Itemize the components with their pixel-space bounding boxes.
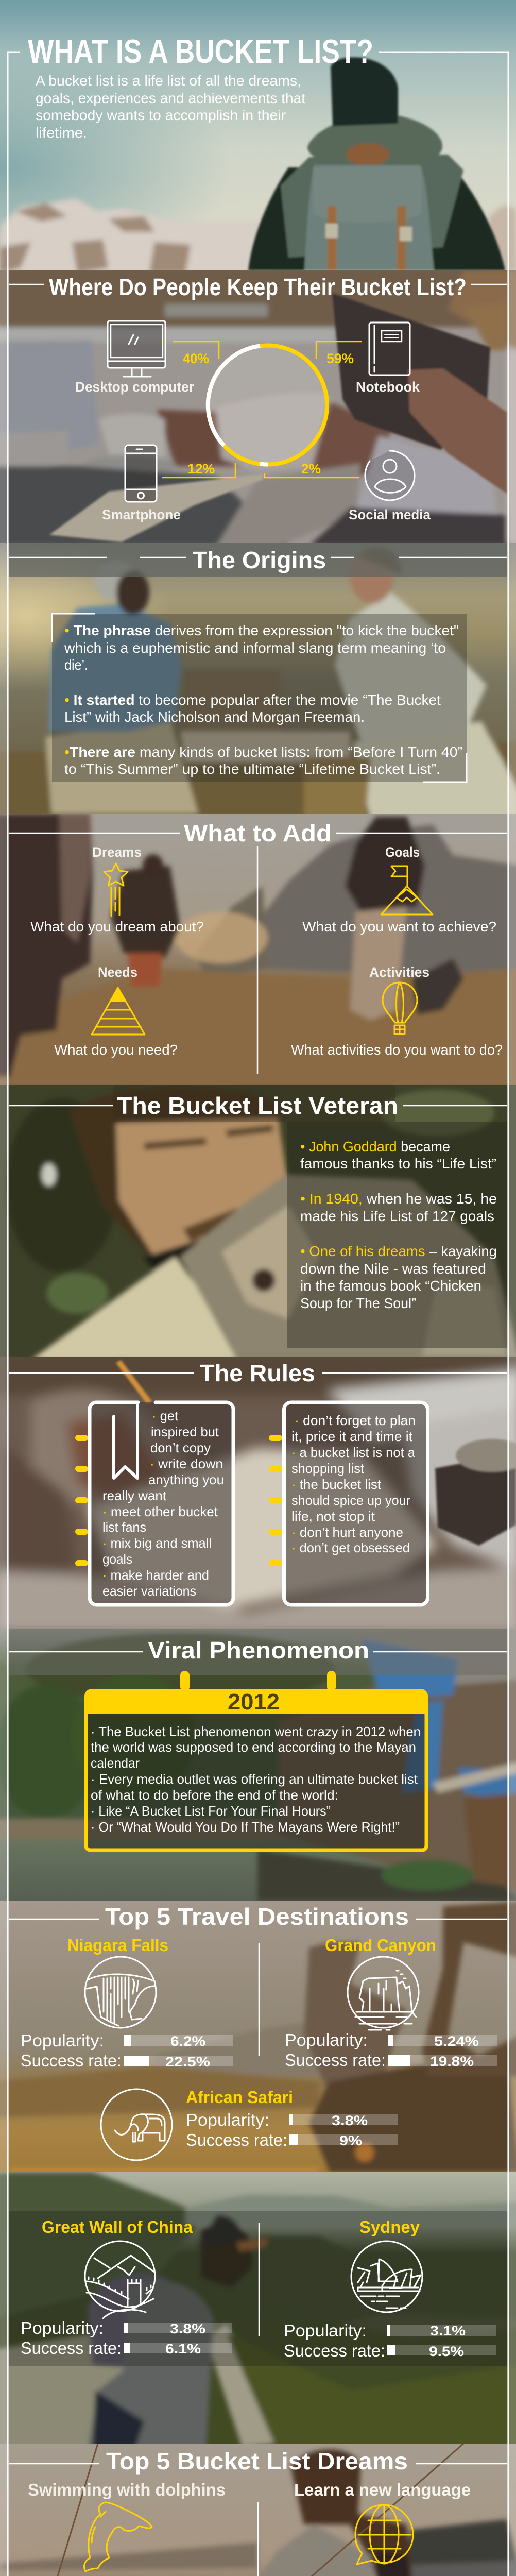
block: goals: Goals: [385, 844, 420, 860]
heading: The Bucket List Veteran: [117, 1092, 398, 1119]
panel: top 5 bucket list dreams: [0, 2444, 516, 2576]
photo: riverside shanty houses: [0, 1628, 516, 1901]
panel: great wall and sydney: [0, 2172, 516, 2452]
text: rules list two: · don’t get obsessed: [291, 1540, 410, 1555]
calendar panel 2012: [84, 1671, 428, 1850]
text panel: origins facts: •There are many kinds of bucket lists: from “Before I Turn 40”: [64, 744, 462, 760]
panel: where do people keep their bucket list: [0, 265, 516, 546]
heading: The Origins: [193, 547, 326, 573]
intro text: somebody wants to accomplish in their: [36, 107, 286, 123]
icon: desktop computer with 40% callout: 40%: [183, 351, 209, 366]
icon: dolphin: [84, 2502, 152, 2571]
icon: globe speech bubble: [355, 2505, 413, 2564]
text: rules list one: goals: [102, 1551, 132, 1567]
icon: desktop computer with 40% callout: [75, 321, 219, 395]
binding tabs: [269, 1435, 282, 1566]
panel: what to add: [0, 814, 516, 1087]
text: john goddard facts: • John Goddard became: [300, 1139, 450, 1155]
heading: The Rules: [200, 1360, 315, 1386]
stats: [186, 2110, 398, 2149]
text: rules list two: it, price it and time it: [291, 1429, 413, 1444]
panel: hero, what is a bucket list: [0, 0, 516, 278]
icon: great wall: [85, 2241, 155, 2318]
stats: 6.2%: [170, 2033, 205, 2049]
text: rules list one: · mix big and small: [102, 1535, 212, 1551]
stats: Success rate:: [21, 2051, 122, 2070]
icon: social media with 2% callout: [265, 451, 431, 522]
photo: man hugging a tiger cub: [0, 1085, 516, 1360]
block: activities: Activities: [369, 964, 429, 980]
block: dreams: [30, 844, 204, 935]
icon: opera house: [351, 2241, 422, 2312]
stats: Popularity:: [21, 2031, 104, 2050]
card: swimming with dolphins: [21, 2480, 233, 2576]
intro text: A bucket list is a life list of all the dreams,: [36, 73, 301, 89]
header band: [9, 1629, 507, 1675]
icon: notebook with 59% callout: [316, 323, 420, 395]
block: goals: What do you want to achieve?: [302, 919, 496, 935]
text panel: origins facts: which is a euphemistic and informal slang term meaning ‘to: [64, 640, 446, 656]
card: niagara falls: [21, 1936, 233, 2070]
hero photo: traveller and snowy mountains: [0, 0, 516, 278]
icon: shooting star: [104, 863, 128, 916]
stats: 6.1%: [165, 2341, 201, 2357]
text: viral facts: · Like “A Bucket List For Your Final Hours”: [91, 1803, 331, 1819]
text panel: origins facts: • The phrase derives from the expression "to kick the bucket": [64, 622, 459, 638]
text: rules list one: inspired but: [151, 1424, 219, 1439]
text: john goddard facts: famous thanks to his “Life List”: [300, 1156, 496, 1172]
photo: couple on a sailing boat: [0, 2444, 516, 2576]
stats: Popularity:: [21, 2318, 104, 2337]
block: activities: What activities do you want to do?: [291, 1042, 503, 1058]
stats: Success rate:: [285, 2050, 386, 2070]
text: rules list one: really want: [102, 1488, 167, 1503]
heading: Top 5 Travel Destinations: [105, 1903, 409, 1930]
heading: What to Add: [184, 820, 332, 846]
card: rules left with bookmark: [75, 1402, 233, 1605]
stats: Success rate:: [21, 2338, 122, 2358]
photo: hikers in a meadow: [0, 814, 516, 1087]
block: dreams: Dreams: [92, 844, 142, 860]
photo: man on a jeep at a savanna: [0, 1901, 516, 2172]
text: viral facts: · The Bucket List phenomenon went crazy in 2012 when: [91, 1724, 421, 1739]
stats: 3.8%: [332, 2113, 368, 2128]
text: viral facts: calendar: [91, 1755, 140, 1771]
text: john goddard facts: made his Life List of 127 goals: [300, 1208, 494, 1224]
icon: flag on a mountain: [381, 866, 433, 914]
header band: [9, 543, 507, 577]
text: rules list one: · get: [152, 1408, 179, 1423]
intro text: goals, experiences and achievements that: [36, 90, 305, 106]
text: viral facts: of what to do before the end of the world:: [91, 1787, 338, 1803]
intro text: lifetime.: [36, 125, 87, 141]
text: viral facts: the world was supposed to end according to the Mayan: [91, 1739, 416, 1755]
text: rules list one: list fans: [102, 1519, 146, 1535]
heading: Where Do People Keep Their Bucket List?: [49, 274, 467, 300]
icon: smartphone with 12% callout: [102, 445, 235, 522]
text: viral facts: · Or “What Would You Do If The Mayans Were Right!”: [91, 1819, 400, 1835]
stats: [21, 2318, 232, 2358]
text: rules list one: easier variations: [102, 1583, 196, 1599]
text: john goddard facts: down the Nile - was featured: [300, 1261, 486, 1277]
block: dreams: What do you dream about?: [30, 919, 204, 935]
icon: pyramid: [92, 988, 145, 1035]
stats: Popularity:: [186, 2110, 269, 2129]
text: rules list two: should spice up your: [291, 1493, 410, 1508]
right text panel: [287, 1122, 507, 1348]
stats: [21, 2031, 233, 2070]
card: african safari: African Safari: [186, 2088, 293, 2107]
stats: [285, 2030, 497, 2070]
stats: 19.8%: [430, 2054, 474, 2069]
calendar panel 2012: 2012: [228, 1689, 280, 1715]
heading: Top 5 Bucket List Dreams: [106, 2448, 408, 2475]
icon: social media with 2% callout: Social media: [349, 507, 431, 522]
card: grand canyon: [285, 1936, 497, 2070]
photo: two men on a ledge: [0, 543, 516, 819]
text: rules list one: don’t copy: [150, 1440, 211, 1455]
stats: 5.24%: [434, 2033, 479, 2049]
block: needs: What do you need?: [54, 1042, 178, 1058]
text panel: origins facts: • It started to become popular after the movie “The Bucket: [64, 692, 441, 708]
text: rules list one: [102, 1408, 224, 1599]
text: john goddard facts: • In 1940, when he was 15, he: [300, 1191, 497, 1207]
icon: notebook with 59% callout: 59%: [326, 351, 354, 366]
text: john goddard facts: Soup for The Soul”: [300, 1295, 416, 1311]
text: rules list one: anything you: [148, 1472, 224, 1487]
stats: Success rate:: [186, 2130, 287, 2149]
title: WHAT IS A BUCKET LIST?: [28, 32, 373, 70]
donut chart: [207, 345, 328, 465]
text: viral facts: [91, 1724, 421, 1835]
card: grand canyon: Grand Canyon: [325, 1936, 436, 1955]
panel: the rules: [0, 1350, 516, 1633]
text panel: origins facts: die’.: [64, 657, 88, 673]
card: niagara falls: Niagara Falls: [67, 1936, 168, 1955]
text: rules list two: · don’t forget to plan: [295, 1413, 416, 1428]
block: needs: Needs: [98, 964, 137, 980]
icon: bookmark: [114, 1402, 137, 1478]
text panel: origins facts: [52, 614, 467, 782]
photo: woman writing at table: [0, 265, 516, 546]
photo: man on the great wall: [0, 2172, 516, 2452]
card: great wall of china: Great Wall of China: [42, 2217, 193, 2236]
text: rules list two: [291, 1413, 416, 1555]
text: viral facts: · Every media outlet was offering an ultimate bucket list: [91, 1771, 418, 1787]
block: goals: [302, 844, 496, 935]
card: learn a new language: Learn a new language: [294, 2480, 471, 2499]
text: rules list one: · write down: [150, 1456, 223, 1471]
card: swimming with dolphins: Swimming with dolphins: [28, 2480, 226, 2499]
block: needs: [54, 964, 178, 1058]
title band: [113, 1085, 395, 1122]
icon: canyon: [348, 1957, 419, 2030]
card: learn a new language: [282, 2480, 495, 2576]
panel: top 5 travel destinations: [0, 1901, 516, 2172]
stats: Popularity:: [284, 2321, 367, 2340]
panel: the origins: [0, 543, 516, 819]
text: rules list two: shopping list: [291, 1461, 365, 1476]
text: john goddard facts: [300, 1139, 497, 1311]
text panel: origins facts: to “This Summer” up to the ultimate “Lifetime Bucket List”.: [64, 761, 440, 777]
text: rules list one: · meet other bucket: [102, 1504, 218, 1519]
text: john goddard facts: in the famous book “Chicken: [300, 1278, 481, 1294]
stats: [284, 2321, 496, 2360]
stats: 9%: [339, 2133, 362, 2148]
card: sydney: Sydney: [359, 2217, 420, 2236]
panel: the bucket list veteran: [0, 1085, 516, 1360]
stats: 3.8%: [170, 2321, 205, 2336]
text: rules list two: · a bucket list is not a: [291, 1445, 416, 1460]
text: rules list two: life, not stop it: [291, 1509, 375, 1524]
stats: Success rate:: [284, 2341, 385, 2360]
icon: elephant: [101, 2089, 172, 2160]
dark band: [9, 2211, 507, 2366]
intro text: [36, 73, 305, 141]
icon: notebook with 59% callout: Notebook: [356, 379, 420, 395]
heading: Viral Phenomenon: [148, 1637, 369, 1664]
card: rules right: [269, 1402, 427, 1605]
card: sydney: [284, 2217, 496, 2360]
icon: social media with 2% callout: 2%: [301, 461, 321, 477]
icon: smartphone with 12% callout: 12%: [187, 461, 215, 477]
card: great wall of china: [21, 2217, 232, 2358]
panel: viral phenomenon: [0, 1628, 516, 1901]
card: african safari: [101, 2088, 398, 2160]
stats: 22.5%: [165, 2054, 210, 2070]
text panel: origins facts: List” with Jack Nicholson and Morgan Freeman.: [64, 709, 365, 725]
block: activities: [291, 964, 503, 1058]
text: rules list two: · the bucket list: [291, 1477, 382, 1492]
binding tabs: [75, 1435, 88, 1566]
stats: 3.1%: [430, 2323, 466, 2338]
text: rules list two: · don’t hurt anyone: [291, 1524, 403, 1540]
icon: waterfall: [85, 1957, 156, 2028]
text: rules list one: · make harder and: [102, 1567, 209, 1583]
stats: 9.5%: [429, 2344, 464, 2359]
icon: hot air balloon: [383, 982, 417, 1034]
stats: Popularity:: [285, 2030, 368, 2049]
photo: writing in a notebook with camera: [0, 1350, 516, 1633]
icon: desktop computer with 40% callout: Desktop computer: [75, 379, 194, 395]
text: john goddard facts: • One of his dreams – kayaking: [300, 1243, 497, 1259]
icon: smartphone with 12% callout: Smartphone: [102, 507, 181, 522]
